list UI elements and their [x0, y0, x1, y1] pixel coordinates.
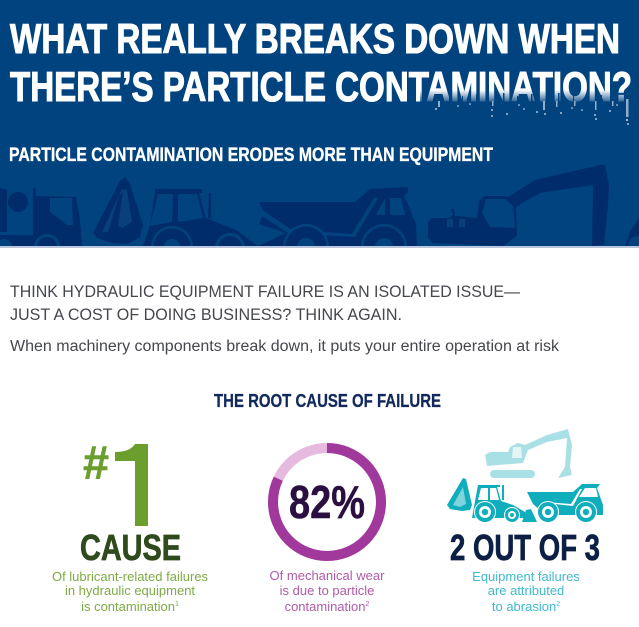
caption	[270, 568, 385, 614]
caption	[52, 569, 209, 614]
big numeral 1	[115, 444, 148, 526]
icon: dump truck silhouette	[259, 187, 417, 246]
caption: 1	[175, 601, 179, 608]
caption: Of mechanical wear	[270, 568, 385, 583]
hash symbol: #	[83, 436, 109, 489]
icon: dump truck light	[527, 484, 603, 523]
caption: in hydraulic equipment	[65, 583, 195, 598]
section heading: THE ROOT CAUSE OF FAILURE	[214, 391, 441, 411]
panel: 2 out of 3	[447, 429, 603, 614]
caption: 2	[556, 601, 560, 608]
intro text: JUST A COST OF DOING BUSINESS? THINK AGAIN.	[10, 305, 402, 324]
caption: is due to particle	[280, 583, 374, 598]
panel: number one cause	[52, 436, 209, 614]
caption: contamination	[285, 599, 366, 614]
caption: is contamination	[81, 599, 175, 614]
machinery silhouettes	[0, 165, 639, 246]
donut chart	[273, 448, 381, 556]
icon: mixer truck silhouette	[0, 188, 82, 246]
caption: are attributed	[488, 583, 564, 598]
icon: excavator light	[485, 429, 572, 478]
CAUSE label: CAUSE	[80, 527, 181, 568]
caption	[472, 569, 580, 614]
caption: 2	[366, 601, 370, 608]
intro subline: When machinery components break down, it puts your entire operation at risk	[10, 338, 559, 355]
caption: Equipment failures	[472, 569, 580, 584]
intro text: THINK HYDRAULIC EQUIPMENT FAILURE IS AN ISOLATED ISSUE—	[10, 282, 520, 301]
percentage: 82%	[289, 476, 365, 528]
subtitle: PARTICLE CONTAMINATION ERODES MORE THAN EQUIPMENT	[9, 144, 493, 166]
caption: Of lubricant-related failures	[52, 569, 209, 584]
icon: backhoe light	[447, 478, 537, 523]
title	[10, 15, 632, 110]
dust particles	[435, 99, 629, 125]
caption: to abrasion	[492, 599, 556, 614]
panel: 82 percent	[270, 448, 385, 614]
icon: excavator silhouette	[428, 165, 639, 246]
intro text	[10, 282, 520, 324]
icon: backhoe loader silhouette	[93, 177, 258, 246]
title dispersion effect	[420, 90, 632, 102]
panel: blue header	[0, 0, 639, 270]
